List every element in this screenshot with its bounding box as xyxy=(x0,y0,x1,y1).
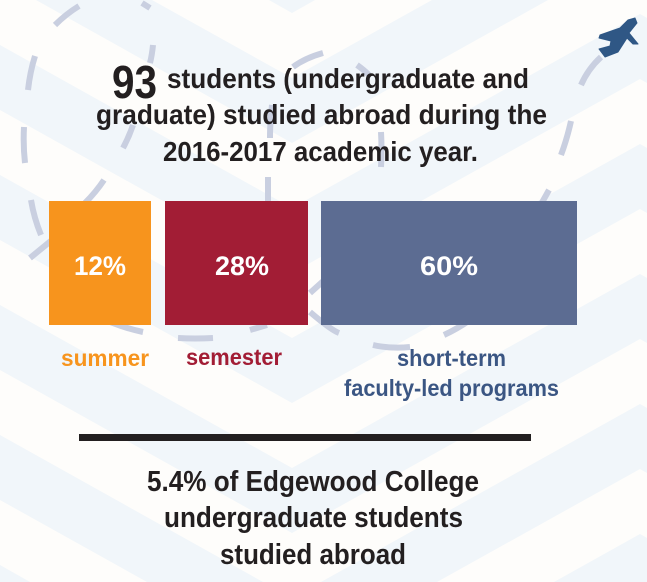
bar: short-term faculty-led programs 60%: 60% xyxy=(420,251,478,281)
heading: students studied abroad: 93 xyxy=(112,56,157,108)
label: semester: semester xyxy=(186,344,282,370)
dashed flight path xyxy=(24,3,601,348)
text: 5.4% of undergraduates xyxy=(147,466,479,571)
heading: students studied abroad: students (undergraduate and xyxy=(167,63,529,94)
bar: summer 12%: 12% xyxy=(74,251,126,281)
text: 5.4% of undergraduates: undergraduate students xyxy=(164,502,463,534)
label: summer: summer xyxy=(61,345,149,371)
label: short-term faculty-led programs xyxy=(344,345,559,401)
bar: semester 28% xyxy=(165,201,308,325)
heading: students studied abroad xyxy=(96,56,547,167)
text: 5.4% of undergraduates: studied abroad xyxy=(220,539,406,571)
label: short-term faculty-led programs: short-term xyxy=(397,345,506,371)
heading: students studied abroad: graduate) studied abroad during the xyxy=(96,99,547,130)
bar: semester 28%: 28% xyxy=(215,251,269,281)
icon: airplane xyxy=(599,18,638,57)
text: 5.4% of undergraduates: 5.4% of Edgewood College xyxy=(147,466,479,498)
bar: short-term faculty-led programs 60% xyxy=(321,201,577,325)
label: short-term faculty-led programs: faculty-led programs xyxy=(344,375,559,401)
heading: students studied abroad: 2016-2017 academic year. xyxy=(163,136,478,167)
bar: summer 12% xyxy=(49,201,151,325)
divider rule xyxy=(79,434,531,441)
